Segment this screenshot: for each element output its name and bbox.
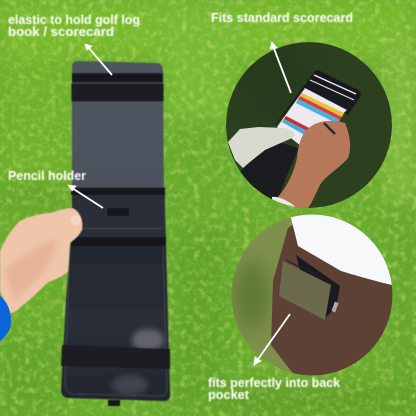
label: standard scorecard: Fits standard scorecard [211,10,353,25]
middle elastic strap [71,237,166,246]
pencil holder flap [72,195,165,237]
arrow: pencil holder [68,185,103,208]
pencil in pocket [331,302,339,312]
book upper panel [72,61,164,208]
white shirt [290,214,392,285]
label: pencil holder: Pencil holder [8,168,86,183]
arrow: back pocket [254,314,290,365]
writing hand [278,121,350,208]
lower velcro band [61,345,170,369]
circle photo: book in back pocket [232,214,392,376]
book lower panel [61,208,170,401]
circle photo: scorecard in use [226,40,392,208]
golf glove hand [228,127,295,168]
black folder base [240,143,298,202]
label: back pocket: fits perfectly into back [208,375,341,390]
log book in pocket [279,261,331,320]
top elastic strap [72,73,163,82]
pencil elastic strap [71,188,165,195]
dark pocket opening [296,255,340,318]
white shirt cuff [272,197,297,208]
golf log book held open [61,61,170,406]
velcro band [72,84,164,102]
arrow: elastic [85,44,112,75]
pen [324,123,335,134]
label: back pocket: pocket [208,387,250,402]
brown trousers [271,224,392,376]
blue sleeve [0,296,11,341]
label: elastic: elastic to hold golf log [8,12,140,27]
label: elastic: book / scorecard [8,24,114,39]
hand holding book [0,208,83,313]
pencil holder tab [107,208,129,216]
blurred background foliage [234,260,270,330]
fingernail [69,213,83,227]
leather highlights [112,329,164,395]
stitching [65,246,167,396]
scorecard [277,88,347,146]
arrow: standard scorecard [270,42,291,93]
bottom tab [108,400,120,406]
scorecard holder [275,70,361,125]
